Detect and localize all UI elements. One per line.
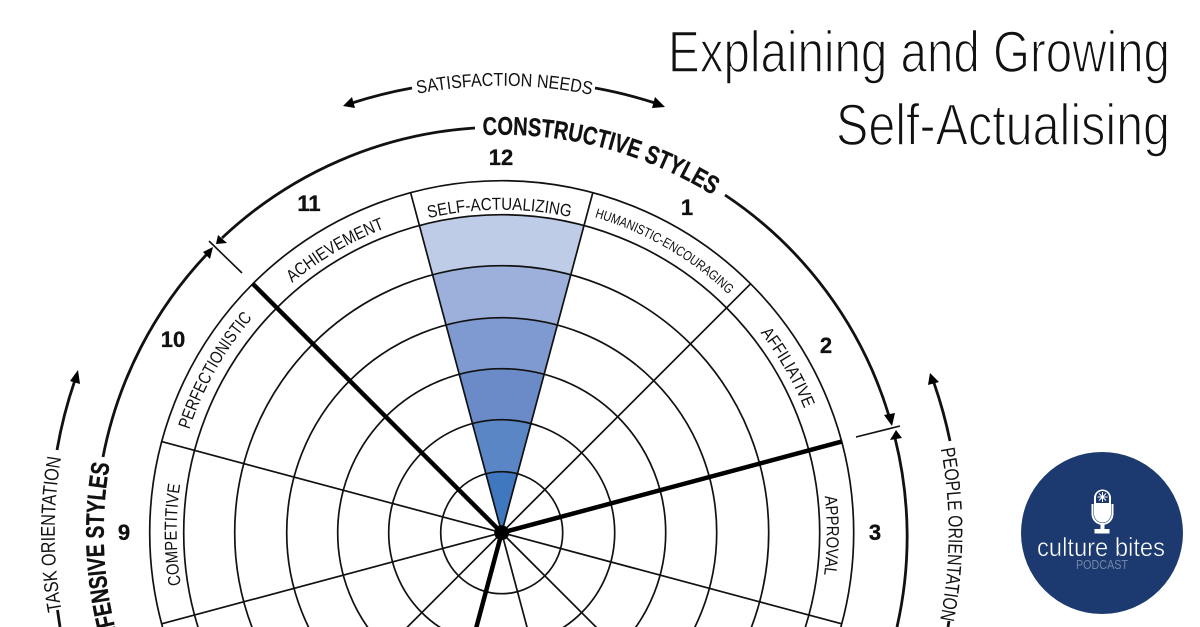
style labels: HUMANISTIC-ENCOURAGING (596, 208, 734, 293)
style numbers: 11 (297, 191, 321, 216)
logo: culture bites podcast (1021, 452, 1183, 614)
arrow: defensive arc right (890, 430, 907, 627)
style numbers: 3 (869, 520, 881, 545)
arrow: people orientation (928, 373, 950, 627)
logo name: culture bites (1037, 532, 1165, 562)
orientation labels: TASK ORIENTATION (41, 456, 61, 613)
logo subtitle: PODCAST (1076, 557, 1128, 572)
style numbers: 9 (118, 520, 130, 545)
arrow: satisfaction needs right (595, 88, 665, 108)
icon: microphone (1092, 490, 1112, 534)
style labels: PERFECTIONISTIC (178, 312, 250, 428)
style numbers: 1 (681, 195, 693, 220)
style labels: SELF-ACTUALIZING (428, 198, 571, 218)
style labels (120, 153, 884, 586)
arrow: constructive arc left (216, 128, 475, 244)
style numbers: 10 (161, 327, 185, 352)
concentric rings (150, 181, 854, 627)
orientation labels: PEOPLE ORIENTATION (940, 448, 962, 621)
title (668, 20, 1170, 158)
spokes (162, 193, 842, 627)
arrow: task orientation (57, 370, 80, 627)
style labels: APPROVAL (824, 496, 839, 575)
style numbers: 2 (820, 333, 832, 358)
group headings on arcs: CONSTRUCTIVE STYLES (483, 116, 720, 194)
tick marks (209, 241, 900, 437)
group headings on arcs (56, 87, 769, 627)
style numbers (118, 145, 881, 545)
style numbers: 12 (489, 145, 513, 170)
circumplex wheel (41, 73, 962, 627)
orientation labels: SATISFACTION NEEDS (416, 73, 592, 94)
arrow: satisfaction needs left (343, 88, 412, 108)
style labels: COMPETITIVE (164, 484, 180, 586)
orientation labels (41, 73, 962, 626)
arrow: constructive arc right (725, 195, 895, 426)
style labels: AFFILIATIVE (760, 328, 815, 408)
highlighted self-actualizing wedge (419, 215, 584, 533)
arrow: defensive arc left (103, 247, 213, 457)
style labels: ACHIEVEMENT (288, 217, 382, 283)
